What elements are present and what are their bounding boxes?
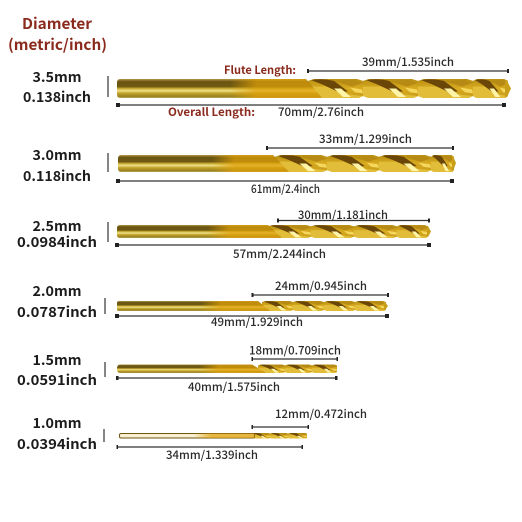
diameter labels: 3.0mm: 3.0mm: [32, 145, 82, 165]
overall length 3.0mm: 61mm/2.4inch: [251, 181, 320, 197]
diameter labels: 2.5mm: [17, 216, 97, 252]
overall length 1.0mm: 34mm/1.339inch: [166, 447, 258, 463]
overall length 3.5mm: [116, 103, 506, 120]
heading: diameter: Diameter: [22, 13, 92, 34]
flute length 1.0mm: [252, 406, 367, 429]
diameter labels: 2.5mm: 2.5mm: [32, 216, 82, 236]
diameter labels: 1.5mm: 1.5mm: [32, 350, 82, 370]
overall length 1.5mm: 40mm/1.575inch: [188, 379, 280, 395]
overall length 3.5mm: 70mm/2.76inch: [278, 104, 364, 120]
heading: diameter: (metric/inch): [8, 34, 107, 55]
flute length 1.5mm: 18mm/0.709inch: [249, 342, 341, 358]
diameter labels: 2.0mm: 0.0787inch: [17, 302, 97, 322]
diameter labels: 3.0mm: [23, 145, 91, 186]
flute length 2.0mm: 24mm/0.945inch: [275, 278, 367, 294]
diameter labels: 3.5mm: 3.5mm: [32, 67, 82, 87]
flute length 3.5mm: Flute Length:: [224, 62, 296, 78]
overall length 3.0mm: [116, 179, 454, 197]
overall length 2.5mm: [115, 243, 431, 262]
overall length 2.0mm: 49mm/1.929inch: [211, 314, 303, 330]
flute length 3.0mm: 33mm/1.299inch: [319, 131, 412, 147]
drill bit 1.5mm: [105, 362, 337, 377]
diameter labels: 3.5mm: 0.138inch: [23, 87, 91, 107]
flute length 1.0mm: 12mm/0.472inch: [275, 406, 367, 422]
flute length 2.5mm: 30mm/1.181inch: [298, 207, 388, 223]
diameter labels: 1.5mm: 0.0591inch: [17, 370, 97, 390]
overall length 2.0mm: [115, 314, 389, 330]
overall length 3.5mm: Overall Length:: [168, 104, 255, 120]
diameter labels: 1.0mm: 0.0394inch: [17, 434, 97, 454]
flute length 2.0mm: [252, 278, 389, 297]
diameter labels: 2.0mm: 2.0mm: [32, 281, 82, 301]
heading: diameter: [8, 13, 107, 55]
drill bit 2.5mm: [108, 222, 431, 242]
diameter labels: 3.0mm: 0.118inch: [23, 166, 91, 186]
diameter labels: 3.5mm: [23, 67, 91, 107]
drill bit 3.5mm: [108, 76, 511, 98]
drill bit 3.0mm: [108, 153, 456, 172]
drill bit 2.0mm: [105, 298, 388, 314]
diameter labels: 1.0mm: [17, 413, 97, 454]
flute length 3.5mm: [224, 54, 509, 78]
flute length 3.5mm: 39mm/1.535inch: [362, 54, 454, 70]
diameter labels: 2.5mm: 0.0984inch: [17, 232, 97, 252]
diameter labels: 2.0mm: [17, 281, 97, 322]
diameter labels: 1.0mm: 1.0mm: [32, 413, 82, 433]
diameter labels: 1.5mm: [17, 350, 97, 390]
drill bit 1.0mm: [104, 429, 307, 442]
overall length 2.5mm: 57mm/2.244inch: [233, 246, 326, 262]
